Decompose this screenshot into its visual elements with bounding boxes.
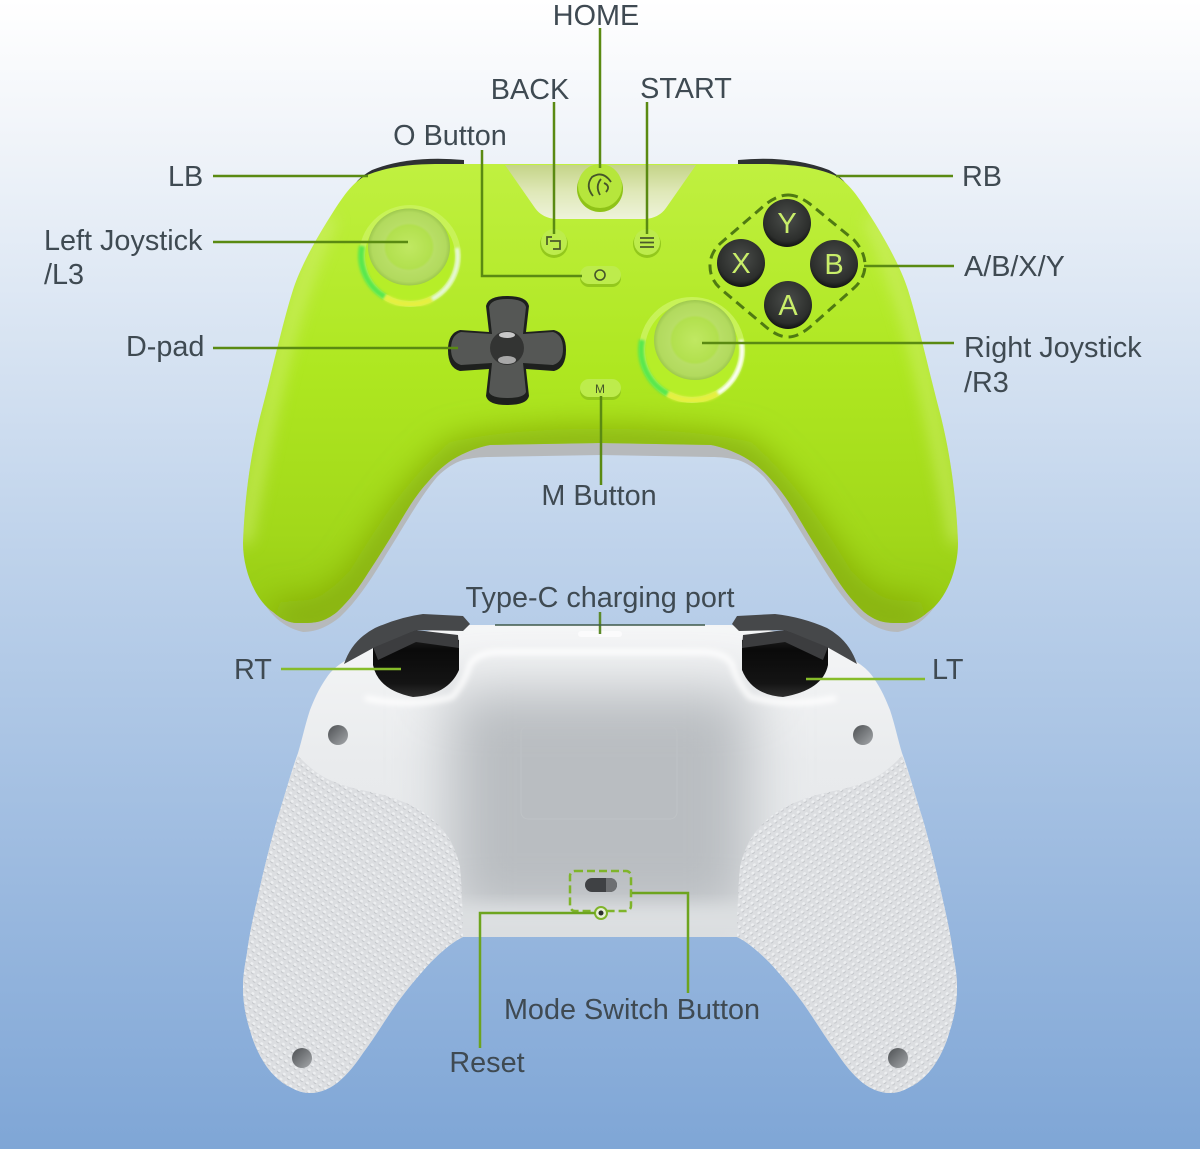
label D-pad: D-pad <box>126 331 204 363</box>
label BACK: BACK <box>491 74 569 106</box>
mode switch <box>570 871 631 911</box>
right textured grip <box>737 756 957 1093</box>
right joystick <box>639 297 745 403</box>
O button <box>580 266 621 287</box>
left textured grip <box>243 756 463 1093</box>
button X: X <box>731 248 751 280</box>
back controller (white) <box>243 614 957 1093</box>
label HOME: HOME <box>553 0 639 32</box>
start button <box>633 229 661 258</box>
leader lines <box>213 28 954 1048</box>
home panel recess <box>505 165 696 219</box>
RT trigger <box>344 614 470 697</box>
label Left Joystick /L3: Left Joystick <box>44 225 202 257</box>
button B: B <box>824 249 844 281</box>
button Y <box>763 199 811 247</box>
button Y: Y <box>777 208 797 240</box>
label Right Joystick /R3: Right Joystick <box>964 332 1142 364</box>
center recess shading <box>365 652 836 940</box>
button A: A <box>778 290 798 322</box>
label LT: LT <box>932 654 963 686</box>
label START: START <box>640 73 732 105</box>
M button <box>580 379 621 400</box>
shell shading <box>243 217 958 617</box>
label O Button: O Button <box>393 120 507 152</box>
label RB: RB <box>962 161 1002 193</box>
label Mode Switch Button: Mode Switch Button <box>504 994 760 1026</box>
white shell <box>243 625 957 1093</box>
label Left Joystick /L3: /L3 <box>44 259 84 291</box>
label M Button: M Button <box>541 480 657 512</box>
grey underside shell <box>246 320 955 632</box>
label Type-C charging port: Type-C charging port <box>466 582 734 614</box>
label Right Joystick /R3: /R3 <box>964 367 1009 399</box>
D-pad <box>448 296 566 405</box>
label Reset: Reset <box>449 1047 525 1079</box>
home button <box>577 164 623 212</box>
screw holes <box>292 725 908 1068</box>
label RT: RT <box>234 654 272 686</box>
back button <box>540 229 568 258</box>
button A <box>764 281 812 329</box>
label LB: LB <box>168 161 203 193</box>
bumper LB <box>351 159 464 197</box>
ABXY dashed outline <box>710 195 865 337</box>
bumper RB <box>738 159 850 197</box>
green shell <box>243 164 958 623</box>
reset hole <box>595 907 607 919</box>
button B <box>810 240 858 288</box>
label A/B/X/Y: A/B/X/Y <box>964 251 1065 283</box>
LT trigger <box>732 614 857 697</box>
M button: M <box>595 382 605 396</box>
left joystick <box>359 205 461 307</box>
front controller (green) <box>243 159 958 632</box>
USB-C port <box>578 631 622 637</box>
button X <box>717 239 765 287</box>
label plate <box>521 726 677 819</box>
